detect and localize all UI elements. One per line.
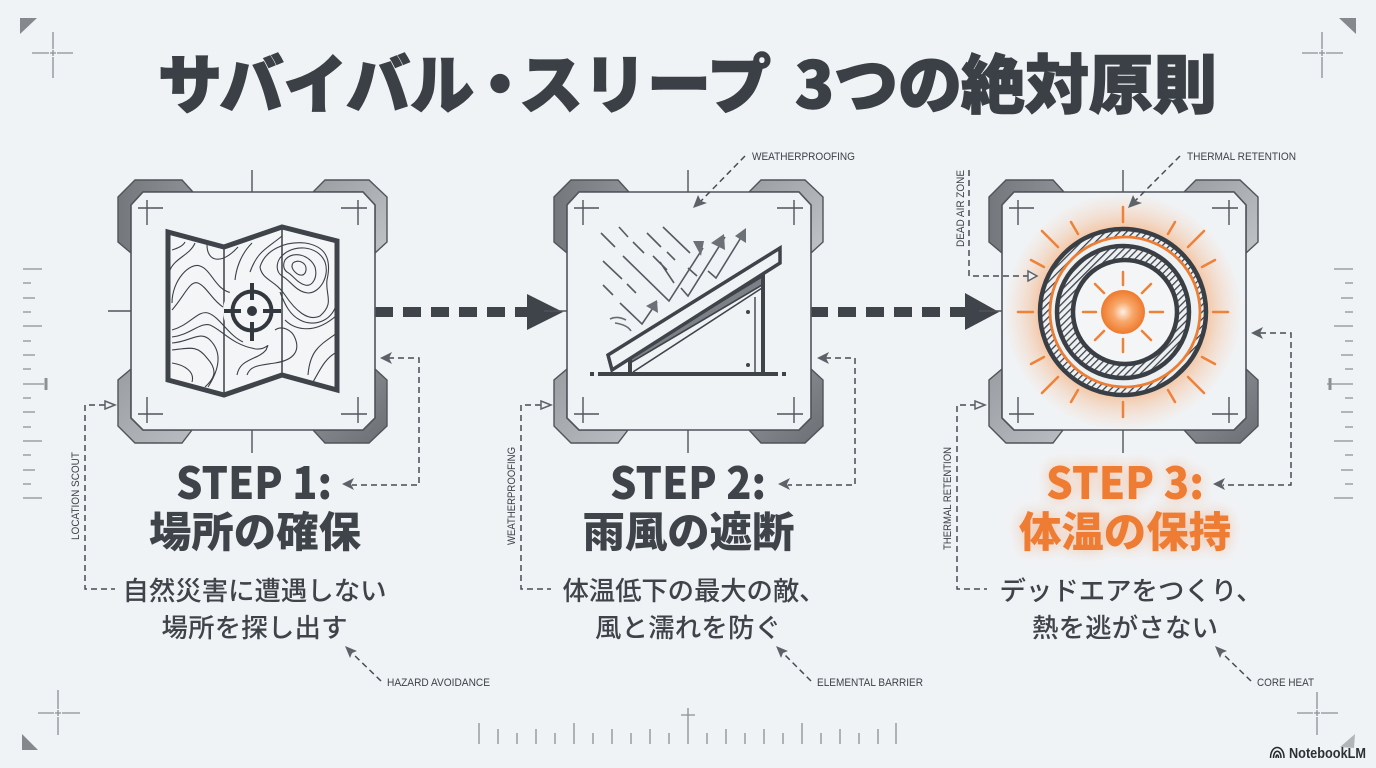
corner mark: top left bbox=[20, 18, 73, 78]
panel frame bbox=[979, 170, 1258, 453]
callout: left thermal retention: THERMAL RETENTION bbox=[942, 447, 954, 550]
text block: step 2 bbox=[562, 448, 826, 645]
text block: step 3: 熱を逃がさない bbox=[1032, 606, 1218, 645]
callout: dead air zone: DEAD AIR ZONE bbox=[955, 170, 967, 247]
icon: lean-to shelter with rain bbox=[590, 227, 786, 376]
callout: right bracket arrow bbox=[1213, 327, 1291, 490]
panel frame bbox=[108, 170, 387, 453]
text block: step 2: 風と濡れを防ぐ bbox=[595, 606, 781, 645]
callout: dead air zone bbox=[955, 170, 1037, 281]
text block: step 2: 雨風の遮断 bbox=[582, 499, 794, 560]
callouts: step 1 bbox=[70, 352, 490, 689]
text block: step 1 bbox=[122, 448, 386, 645]
callout: left thermal retention bbox=[942, 401, 987, 589]
corner mark: bottom left bbox=[22, 690, 80, 750]
callouts: step 3 bbox=[942, 151, 1314, 689]
icon: insulated layers with heat core bbox=[1003, 192, 1243, 432]
panel: step 2 shelter bbox=[544, 170, 823, 453]
callout: left weatherproofing bbox=[506, 401, 551, 589]
callout: core heat bbox=[1215, 646, 1314, 689]
left ruler bbox=[23, 269, 46, 498]
callouts: step 2 bbox=[506, 151, 923, 689]
callout: location scout: LOCATION SCOUT bbox=[70, 452, 82, 540]
bottom ruler bbox=[479, 708, 896, 744]
arrow: step 1 to step 2 bbox=[375, 294, 563, 330]
text block: step 1: STEP 1: bbox=[176, 448, 332, 512]
step 3 heading with glow bbox=[1019, 448, 1231, 560]
icon: topographic map bbox=[168, 227, 337, 395]
text block: step 2: 体温低下の最大の敵、 bbox=[562, 569, 826, 608]
panel: step 1 map bbox=[108, 170, 387, 453]
callout: thermal retention top: THERMAL RETENTION bbox=[1187, 151, 1296, 163]
step 3 heading with glow: 体温の保持 bbox=[1019, 499, 1231, 560]
callout: left weatherproofing: WEATHERPROOFING bbox=[506, 447, 518, 545]
corner mark: top right bbox=[1302, 18, 1356, 78]
callout: elemental barrier: ELEMENTAL BARRIER bbox=[817, 677, 923, 689]
text block: step 3: デッドエアをつくり、 bbox=[1000, 569, 1262, 608]
panel: step 3 heat retention bbox=[979, 170, 1258, 453]
text block: step 3 bbox=[1000, 448, 1262, 645]
callout: hazard avoidance: HAZARD AVOIDANCE bbox=[387, 677, 490, 689]
text block: step 1: 自然災害に遭遇しない bbox=[122, 569, 386, 608]
text block: step 2: STEP 2: bbox=[610, 448, 766, 512]
callout: right bracket arrow bbox=[342, 352, 419, 490]
logo: NotebookLM: NotebookLM bbox=[1289, 746, 1366, 762]
text block: step 1: 場所の確保 bbox=[149, 499, 361, 560]
callout: right bracket arrow bbox=[778, 352, 855, 490]
title: 絶対原則 bbox=[961, 35, 1217, 127]
arrow: step 2 to step 3 bbox=[810, 293, 999, 330]
title: スリープ bbox=[519, 35, 771, 127]
text block: step 1: 場所を探し出す bbox=[162, 606, 348, 645]
title: サバイバル bbox=[158, 35, 474, 127]
callout: location scout bbox=[70, 401, 115, 589]
callout: thermal retention top bbox=[1128, 151, 1296, 208]
callout: elemental barrier bbox=[776, 646, 923, 689]
panel frame bbox=[544, 170, 823, 453]
title: ・ bbox=[468, 35, 532, 127]
callout: weatherproofing top: WEATHERPROOFING bbox=[752, 151, 855, 163]
callout: core heat: CORE HEAT bbox=[1257, 677, 1314, 689]
callout: hazard avoidance bbox=[345, 646, 490, 689]
title: 3つの bbox=[795, 35, 962, 127]
right ruler bbox=[1327, 269, 1353, 498]
step 3 heading with glow: STEP 3: bbox=[1046, 448, 1204, 512]
corner mark: bottom right bbox=[1297, 692, 1355, 748]
callout: weatherproofing top bbox=[693, 151, 855, 208]
